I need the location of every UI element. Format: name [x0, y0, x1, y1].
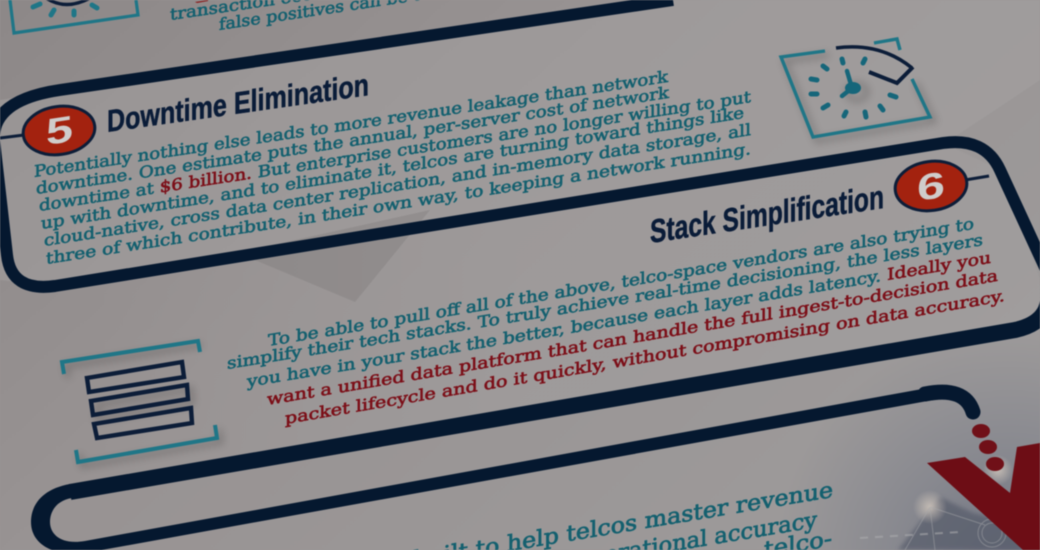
connector and badge 5: 5 [46, 107, 73, 153]
connector and badge 5 [0, 102, 98, 159]
text: downtime paragraph: three of which contribute, in their own way, to keeping a network running. [46, 139, 751, 268]
text: stack paragraph [227, 214, 1005, 428]
text: downtime paragraph: downtime at $6 billion. But enterprise customers are no longer willing to put [39, 87, 752, 215]
icon: fraud sun [10, 0, 138, 33]
connector and badge 6 [892, 157, 989, 215]
heading: downtime elimination: Downtime Elimination [107, 67, 369, 139]
frame lines: panels 5 and 6 outline [0, 0, 1040, 300]
icon: layered stack [62, 341, 221, 466]
text: downtime paragraph: up with downtime, and to eliminate it, telcos are turning toward things like [41, 103, 744, 233]
frame lines: panel 6 bottom [70, 290, 1040, 492]
logo: red V mark [927, 443, 1040, 550]
connector and badge 6: 6 [917, 163, 945, 209]
text: downtime paragraph: downtime. One estimate puts the annual, per-server cost of network [36, 83, 669, 198]
text: stack paragraph: you have in your stack the better, because each layer adds latency. Ideally you [246, 248, 991, 391]
globe photo behind the logo [860, 455, 1040, 550]
text: stack paragraph: simplify their tech stacks. To truly achieve real-time decisioning, the less layers [227, 230, 983, 373]
connector dots [972, 424, 1004, 471]
text: downtime paragraph: cloud-native, cross data center replication, and in-memory data storage, all [44, 120, 751, 250]
panel: stack simplification [62, 157, 1005, 466]
text: downtime paragraph: Potentially nothing else leads to more revenue leakage than network [34, 67, 668, 181]
text: downtime paragraph [34, 67, 752, 268]
text: stack paragraph: want a unified data platform that can handle the full ingest-to-decision data [267, 266, 998, 409]
frame lines: U-turn and lower line [31, 387, 933, 550]
text: stack paragraph: To be able to pull off all of the above, telco-space vendors are also trying to [268, 214, 974, 350]
text: stack paragraph: packet lifecycle and do it quickly, without compromising on data accuracy. [285, 286, 1005, 428]
panel: fraud card (cropped) [10, 0, 424, 34]
icon: clock [781, 39, 934, 141]
panel: downtime elimination [0, 39, 934, 268]
frame end cap [925, 392, 973, 412]
heading: stack simplification: Stack Simplification [650, 179, 884, 251]
